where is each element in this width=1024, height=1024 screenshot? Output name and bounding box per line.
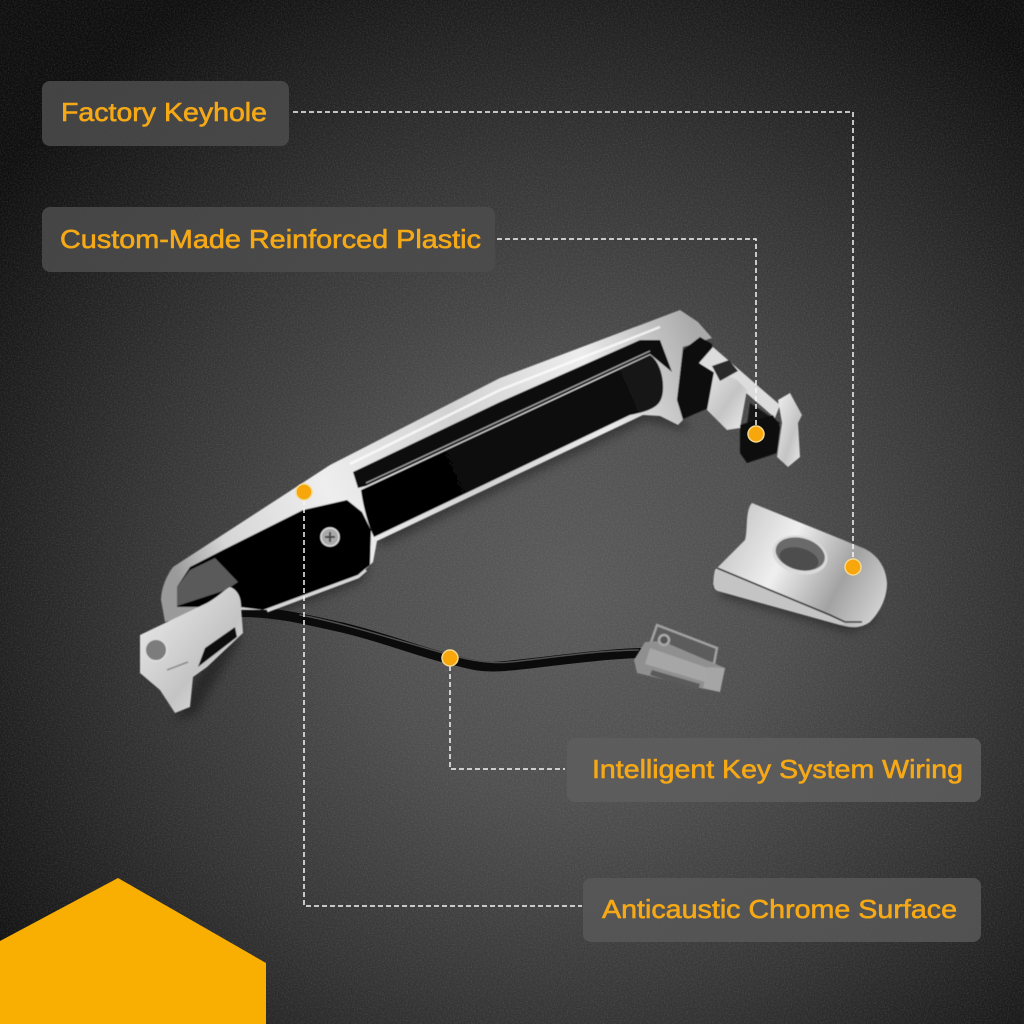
label: Intelligent Key System Wiring [567, 738, 981, 802]
product: wire connector [634, 625, 725, 692]
bracket dark gap [747, 403, 780, 440]
product: keyhole cover [713, 503, 887, 627]
label: Custom-Made Reinforced Plastic: Custom-Made Reinforced Plastic [60, 224, 481, 254]
label: Factory Keyhole: Factory Keyhole [61, 97, 267, 127]
marker dots [296, 426, 861, 666]
label: Factory Keyhole [42, 81, 289, 146]
chrome highlight line [350, 327, 660, 464]
bracket box [699, 363, 747, 430]
black rubber gasket [677, 337, 714, 419]
dark reflection strip [353, 340, 672, 488]
keyhole [768, 530, 832, 580]
handle chrome body [161, 310, 712, 622]
right bracket [699, 347, 802, 467]
product shadow [175, 408, 880, 720]
bracket end piece [777, 393, 802, 467]
chrome bottom edge of cavity [267, 570, 366, 611]
left clip [140, 587, 243, 713]
label: Anticaustic Chrome Surface: Anticaustic Chrome Surface [602, 894, 957, 924]
label: Custom-Made Reinforced Plastic [42, 207, 495, 272]
black plastic block [740, 415, 780, 463]
product: door handle [140, 310, 802, 713]
product: wire [240, 612, 640, 667]
chrome inner line [366, 351, 650, 483]
yellow corner shape [0, 878, 266, 1024]
label: Intelligent Key System Wiring: Intelligent Key System Wiring [592, 754, 963, 784]
black grip [361, 355, 663, 537]
bracket hole [712, 360, 738, 381]
cavity shine [177, 558, 238, 606]
black cavity at the end of the handle [177, 500, 371, 610]
screw [321, 528, 339, 546]
bracket upper arm [699, 347, 780, 418]
cover lower face [713, 568, 848, 625]
label: Anticaustic Chrome Surface [583, 878, 981, 942]
leader lines [293, 112, 853, 906]
cover shadow line [717, 568, 862, 622]
